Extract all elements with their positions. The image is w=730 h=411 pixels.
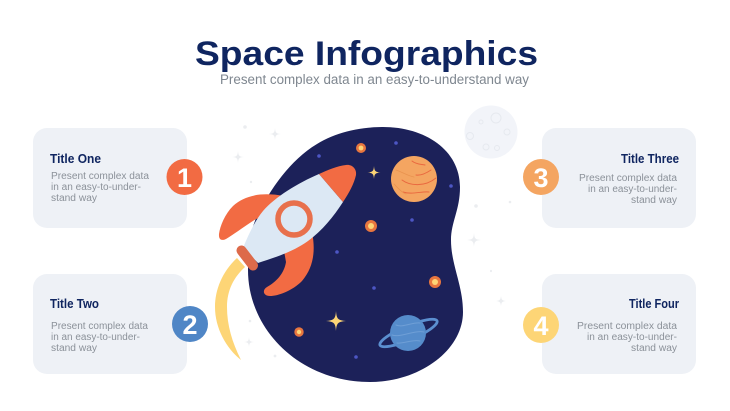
icon: space blob xyxy=(248,127,463,382)
icon: rocket flame xyxy=(215,258,245,360)
icon: rocket xyxy=(219,165,356,296)
icon: ringed planet xyxy=(377,314,440,352)
body xyxy=(243,174,343,263)
panel: title three: stand way xyxy=(631,195,677,206)
panel: title three: in an easy-to-under- xyxy=(588,184,677,195)
panel: title two: Title Two xyxy=(50,297,99,311)
small orange dots xyxy=(294,143,441,337)
number badge 3 xyxy=(523,159,559,195)
panel: title two: in an easy-to-under- xyxy=(51,332,140,343)
number badge 4 xyxy=(523,307,559,343)
panel: title four: Present complex data xyxy=(577,321,677,332)
nose cone xyxy=(319,165,356,202)
panel: title four: Title Four xyxy=(629,297,679,311)
number badge 2: 2 xyxy=(182,310,198,340)
panel: title one: Title One xyxy=(50,152,101,166)
panel: title four xyxy=(542,274,696,374)
number badge 1: 1 xyxy=(177,163,192,193)
panel: title one: Present complex data xyxy=(51,171,149,182)
number badge 4: 4 xyxy=(533,311,549,341)
panel: title three xyxy=(542,128,696,228)
window xyxy=(278,203,310,235)
panel: title one: in an easy-to-under- xyxy=(51,182,141,193)
title: Space Infographics xyxy=(195,35,538,73)
panel: title one xyxy=(33,128,187,228)
panel: title two xyxy=(33,274,187,374)
number badge 3: 3 xyxy=(533,163,549,193)
blue star dots xyxy=(317,141,453,359)
panel: title one: stand way xyxy=(51,193,97,204)
panel: title three: Title Three xyxy=(621,152,679,166)
number badge 2 xyxy=(172,306,208,342)
panel: title two: stand way xyxy=(51,343,97,354)
background faint stars xyxy=(232,125,511,357)
icon: orange planet xyxy=(391,156,437,202)
yellow sparkle stars xyxy=(326,166,380,331)
number badge 1 xyxy=(166,159,202,195)
lower fin xyxy=(264,232,314,296)
panel: title four: stand way xyxy=(631,343,677,354)
panel: title four: in an easy-to-under- xyxy=(587,332,677,343)
upper fin xyxy=(219,194,284,240)
icon: moon xyxy=(464,106,518,158)
subtitle: Present complex data in an easy-to-understand way xyxy=(220,72,529,87)
panel: title two: Present complex data xyxy=(51,321,148,332)
engine base xyxy=(242,250,253,266)
panel: title three: Present complex data xyxy=(579,173,677,184)
